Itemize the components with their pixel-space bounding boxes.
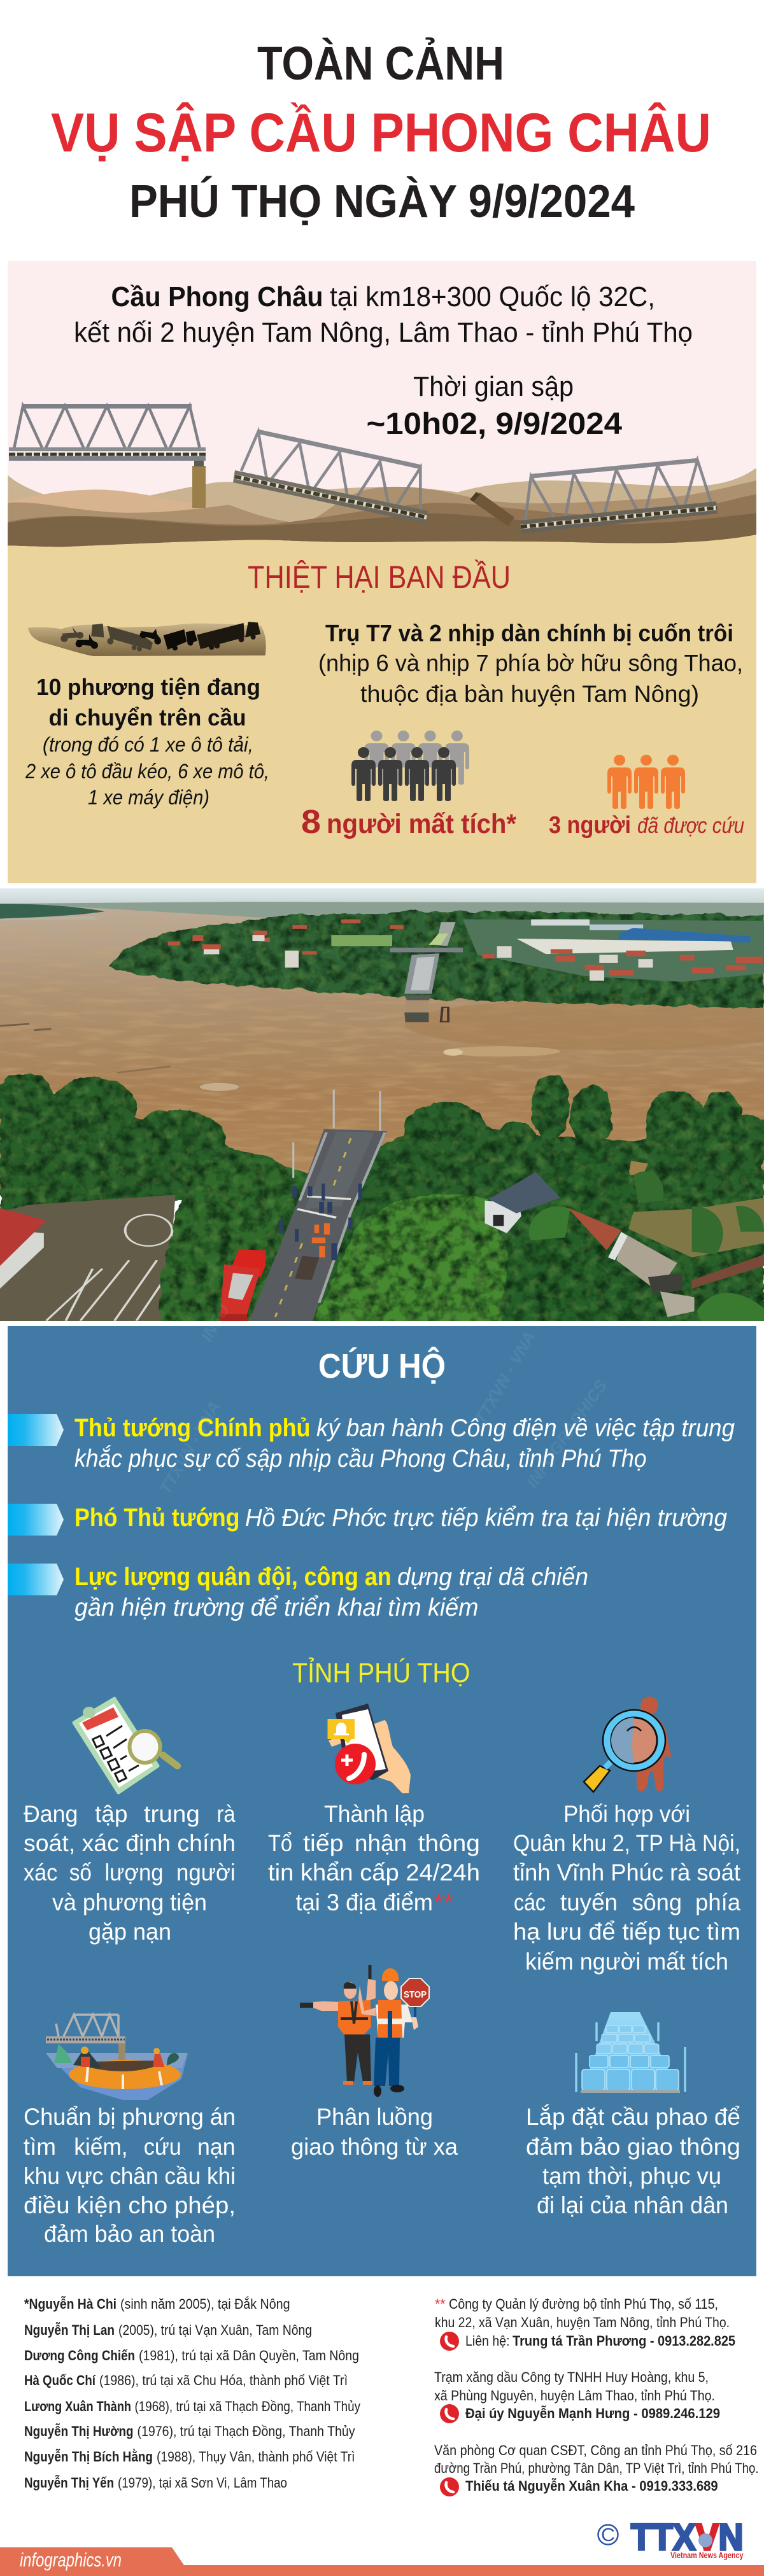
step: search plan: cứu bbox=[144, 2134, 181, 2160]
logo: TTXVN copyright: TTXVN bbox=[631, 2517, 744, 2558]
stat: 3 rescued: đã được cứu bbox=[637, 813, 744, 838]
footnote: list of missing people: (sinh năm 2005), tại Đắk Nông bbox=[120, 2296, 290, 2312]
step: traffic diversion: giao thông từ xa bbox=[291, 2134, 458, 2160]
step: hotline team: thông bbox=[418, 1830, 480, 1856]
watermarks: INFOGRAPHICS bbox=[522, 1376, 611, 1491]
directive: Deputy Prime Minister bbox=[74, 1504, 727, 1532]
step: coordinate river search: tuyến bbox=[560, 1889, 618, 1915]
footnote: list of missing people: Lương Xuân Thành bbox=[24, 2398, 131, 2414]
panel: bridge information and initial damage bbox=[8, 261, 757, 883]
yard bbox=[0, 1195, 176, 1323]
directive: army and police: gần hiện trường để triển khai tìm kiếm bbox=[74, 1594, 479, 1621]
icon: phone 1 bbox=[440, 2332, 459, 2351]
step: pontoon bridge: đảm bảo giao thông bbox=[526, 2134, 740, 2160]
step: traffic diversion bbox=[291, 2104, 458, 2160]
step: coordinate river search: tỉnh Vĩnh Phúc rà soát bbox=[513, 1859, 741, 1886]
step: search plan: Chuẩn bị phương án bbox=[24, 2104, 236, 2130]
step: search plan: tìm bbox=[24, 2134, 56, 2160]
footnote: list of missing people: Dương Công Chiến bbox=[24, 2348, 135, 2363]
step: coordinate river search: sông bbox=[632, 1889, 682, 1915]
van bbox=[295, 1256, 319, 1280]
watermarks: TTXVN - VNA bbox=[470, 1328, 539, 1427]
arrow marker 1 bbox=[8, 1414, 64, 1446]
footer bar bbox=[0, 2547, 764, 2576]
stat: 8 missing bbox=[301, 804, 516, 841]
title: TOÀN CẢNH bbox=[257, 37, 504, 90]
step: hotline team: ** bbox=[434, 1889, 453, 1915]
directive: army and police: Lực lượng quân đội, công an bbox=[74, 1563, 391, 1591]
step: verifying victims: xác bbox=[24, 1859, 57, 1886]
footnote: list of missing people: Nguyễn Thị Lan bbox=[24, 2322, 115, 2338]
footnote: hotline locations bbox=[434, 2296, 759, 2496]
step: coordinate river search bbox=[513, 1801, 741, 1975]
logo: TTXVN copyright: C bbox=[601, 2525, 615, 2545]
arrow marker 2 bbox=[8, 1504, 64, 1536]
step: pontoon bridge: đi lại của nhân dân bbox=[537, 2192, 728, 2218]
footnote: list of missing people: (1981), trú tại xã Dân Quyền, Tam Nông bbox=[139, 2348, 359, 2363]
footnote: list of missing people: Nguyễn Thị Hường bbox=[24, 2423, 134, 2439]
bridge: standing span and pier bbox=[9, 404, 206, 508]
step: verifying victims bbox=[24, 1801, 236, 1945]
arrow marker 3 bbox=[8, 1564, 64, 1595]
step: search plan: khu vực chân cầu khi bbox=[24, 2163, 236, 2189]
fire truck bbox=[229, 1249, 265, 1277]
footnote: hotline locations: Liên hệ: bbox=[465, 2333, 509, 2349]
icon: traffic controllers bbox=[300, 1965, 429, 2097]
bridge: collapsed right span bbox=[520, 460, 718, 533]
footnote: list of missing people: Nguyễn Thị Yến bbox=[24, 2475, 114, 2491]
step: verifying victims: người bbox=[176, 1859, 236, 1886]
heading: initial damage: THIỆT HẠI BAN ĐẦU bbox=[248, 559, 511, 595]
text: vehicles on the bridge: 2 xe ô tô đầu kéo, 6 xe mô tô, bbox=[25, 760, 269, 783]
directive: army and police: dựng trại dã chiến bbox=[397, 1564, 588, 1591]
icon: clipboard checklist bbox=[74, 1698, 178, 1793]
text: pier and spans swept away: thuộc địa bàn huyện Tam Nông) bbox=[360, 681, 699, 707]
step: hotline team: tin khẩn cấp 24/24h bbox=[268, 1859, 480, 1886]
footnote: list of missing people: *Nguyễn Hà Chi bbox=[24, 2296, 117, 2312]
ground waves bbox=[8, 468, 757, 547]
step: coordinate river search: hạ lưu để tiếp tục tìm bbox=[513, 1919, 740, 1945]
watermarks: INFO bbox=[197, 1301, 233, 1345]
bridge description: tại km18+300 Quốc lộ 32C, bbox=[330, 281, 655, 312]
footnote: list of missing people: (2005), trú tại Vạn Xuân, Tam Nông bbox=[118, 2322, 312, 2338]
step: hotline team: Thành lập bbox=[324, 1801, 425, 1827]
bridge: broken pier bbox=[470, 492, 514, 526]
step: verifying victims: gặp nạn bbox=[88, 1919, 171, 1945]
step: verifying victims: lượng bbox=[104, 1859, 163, 1886]
stat: 3 rescued bbox=[549, 812, 744, 839]
lamp posts bbox=[294, 1089, 380, 1178]
directive: Prime Minister: Thủ tướng Chính phủ bbox=[74, 1414, 311, 1442]
collapse time: ~10h02, 9/9/2024 bbox=[367, 407, 622, 441]
step: verifying victims: số bbox=[69, 1859, 92, 1886]
footnote: hotline locations: khu 22, xã Vạn Xuân, huyện Tam Nông, tỉnh Phú Thọ. bbox=[435, 2314, 730, 2330]
stat: 3 rescued: 3 người bbox=[549, 812, 631, 839]
footnote: hotline locations: Đại úy Nguyễn Mạnh Hưng - 0989.246.129 bbox=[465, 2405, 720, 2421]
near bridge road bbox=[248, 1129, 387, 1323]
logo: TTXVN copyright: Vietnam News Agency bbox=[670, 2551, 744, 2560]
icon: magnifier over person bbox=[584, 1697, 671, 1792]
photo: aerial view of the collapsed bridge bbox=[0, 888, 764, 1328]
step: verifying victims: soát, xác định chính bbox=[24, 1830, 236, 1856]
icon: vehicles on collapsed ground bbox=[28, 622, 266, 656]
footnote: list of missing people: (1979), tại xã Sơn Vi, Lâm Thao bbox=[118, 2475, 287, 2491]
footnote: list of missing people: (1976), trú tại Thạch Đồng, Thanh Thủy bbox=[138, 2423, 355, 2439]
icon: rescue boat under bridge bbox=[46, 2015, 188, 2100]
footnote: list of missing people: Hà Quốc Chí bbox=[24, 2372, 96, 2388]
step: coordinate river search: Quân khu 2, TP Hà Nội, bbox=[513, 1830, 740, 1856]
text: vehicles on the bridge bbox=[25, 674, 269, 809]
step: pontoon bridge: tạm thời, phục vụ bbox=[542, 2163, 721, 2189]
heading: Phu Tho province: TỈNH PHÚ THỌ bbox=[292, 1657, 470, 1689]
step: search plan: nạn bbox=[197, 2134, 236, 2160]
step: verifying victims: tập bbox=[95, 1801, 127, 1827]
footnote: hotline locations: Công ty Quản lý đường bộ tỉnh Phú Thọ, số 115, bbox=[449, 2296, 718, 2312]
responders bbox=[279, 1184, 362, 1260]
footnote: list of missing people: (1986), trú tại xã Chu Hóa, thành phố Việt Trì bbox=[99, 2372, 348, 2388]
footnote: hotline locations: Trạm xăng dầu Công ty TNHH Huy Hoàng, khu 5, bbox=[434, 2369, 709, 2385]
title: PHÚ THỌ NGÀY 9/9/2024 bbox=[129, 176, 635, 227]
near-left trees bbox=[0, 1073, 308, 1224]
step: verifying victims: và phương tiện bbox=[52, 1889, 207, 1915]
red-roof building bbox=[0, 1229, 44, 1289]
step: pontoon bridge: Lắp đặt cầu phao để bbox=[526, 2104, 740, 2130]
text: pier and spans swept away: Trụ T7 và 2 nhịp dàn chính bị cuốn trôi bbox=[325, 620, 733, 647]
icon: phone hotline bbox=[327, 1704, 411, 1793]
bridge description bbox=[74, 281, 693, 348]
directive: Prime Minister: ký ban hành Công điện về việc tập trung bbox=[316, 1415, 735, 1442]
text: vehicles on the bridge: 1 xe máy điện) bbox=[88, 786, 209, 809]
text: pier and spans swept away bbox=[318, 620, 743, 707]
far bridge span bbox=[404, 953, 439, 994]
tree column beside road bbox=[160, 1157, 312, 1323]
watermarks bbox=[155, 1301, 611, 1497]
panel: rescue bbox=[8, 1301, 756, 2276]
icon: floating pontoon bridge bbox=[576, 2012, 685, 2093]
text: vehicles on the bridge: (trong đó có 1 xe ô tô tải, bbox=[43, 733, 253, 756]
step: hotline team: Tổ bbox=[268, 1830, 292, 1856]
step: coordinate river search: phía bbox=[695, 1889, 740, 1915]
heading: rescue: CỨU HỘ bbox=[318, 1347, 446, 1385]
footnote: hotline locations: Thiếu tá Nguyễn Xuân Kha - 0919.333.689 bbox=[465, 2478, 718, 2494]
footnote: hotline locations: xã Phùng Nguyên, huyện Lâm Thao, tỉnh Phú Thọ. bbox=[434, 2388, 715, 2404]
footnote: list of missing people: (1968), trú tại xã Thạch Đồng, Thanh Thủy bbox=[135, 2398, 360, 2414]
watermarks: TTXVN - VNA bbox=[155, 1398, 224, 1497]
footnote: list of missing people: (1988), Thụy Vân, thành phố Việt Trì bbox=[157, 2449, 355, 2465]
step: search plan: kiếm, bbox=[74, 2134, 127, 2160]
directive: Prime Minister bbox=[74, 1414, 735, 1473]
footnote: hotline locations: ** bbox=[435, 2296, 446, 2312]
icon: phone 2 bbox=[440, 2404, 459, 2423]
step: search plan bbox=[24, 2104, 236, 2247]
step: coordinate river search: Phối hợp với bbox=[563, 1801, 690, 1827]
icon: traffic controllers: STOP bbox=[404, 1989, 427, 2000]
bridge description: Cầu Phong Châu bbox=[111, 281, 323, 312]
icon: eight missing people bbox=[351, 731, 469, 801]
directive: army and police bbox=[74, 1563, 588, 1621]
text: vehicles on the bridge: 10 phương tiện đang bbox=[36, 674, 260, 700]
footnote: list of missing people: Nguyễn Thị Bích Hằng bbox=[24, 2449, 153, 2465]
title bbox=[51, 37, 711, 227]
stat: 8 missing: người mất tích* bbox=[327, 809, 516, 839]
far bank bbox=[110, 911, 764, 1007]
step: traffic diversion: Phân luồng bbox=[316, 2104, 433, 2130]
near-right trees bbox=[292, 1074, 764, 1328]
collapse time: Thời gian sập bbox=[413, 371, 574, 402]
text: pier and spans swept away: (nhịp 6 và nhịp 7 phía bờ hữu sông Thao, bbox=[318, 650, 743, 676]
step: verifying victims: Đang bbox=[24, 1801, 78, 1827]
footer bar: infographics.vn bbox=[20, 2549, 122, 2571]
step: pontoon bridge bbox=[526, 2104, 740, 2218]
icon: three rescued people bbox=[607, 755, 685, 809]
footnote: hotline locations: Trung tá Trần Phương - 0913.282.825 bbox=[513, 2333, 735, 2349]
step: verifying victims: trung bbox=[144, 1801, 200, 1827]
bridge description: kết nối 2 huyện Tam Nông, Lâm Thao - tỉnh Phú Thọ bbox=[74, 317, 693, 348]
directive: Deputy Prime Minister: Hồ Đức Phớc trực tiếp kiểm tra tại hiện trường bbox=[245, 1504, 727, 1532]
text: vehicles on the bridge: di chuyển trên cầu bbox=[48, 704, 246, 731]
step: coordinate river search: kiếm người mất tích bbox=[525, 1949, 728, 1975]
step: hotline team: tiếp bbox=[303, 1830, 344, 1856]
title: VỤ SẬP CẦU PHONG CHÂU bbox=[51, 102, 711, 164]
step: search plan: điều kiện cho phép, bbox=[24, 2192, 236, 2218]
icon: phone 3 bbox=[440, 2477, 459, 2496]
step: hotline team: tại 3 địa điểm bbox=[295, 1889, 433, 1915]
step: coordinate river search: các bbox=[514, 1889, 546, 1915]
step: hotline team: nhận bbox=[355, 1830, 407, 1856]
stat: 8 missing: 8 bbox=[301, 804, 321, 841]
footnote: list of missing people bbox=[24, 2296, 360, 2491]
step: search plan: đảm bảo an toàn bbox=[44, 2221, 215, 2247]
collapse time bbox=[367, 371, 622, 441]
step: verifying victims: rà bbox=[216, 1801, 236, 1827]
house bbox=[485, 1201, 521, 1233]
directive: Deputy Prime Minister: Phó Thủ tướng bbox=[74, 1504, 239, 1532]
step: hotline team bbox=[268, 1801, 480, 1915]
directive: Prime Minister: khắc phục sự cố sập nhịp cầu Phong Châu, tỉnh Phú Thọ bbox=[74, 1445, 647, 1473]
bridge: collapsed middle span bbox=[233, 431, 428, 524]
